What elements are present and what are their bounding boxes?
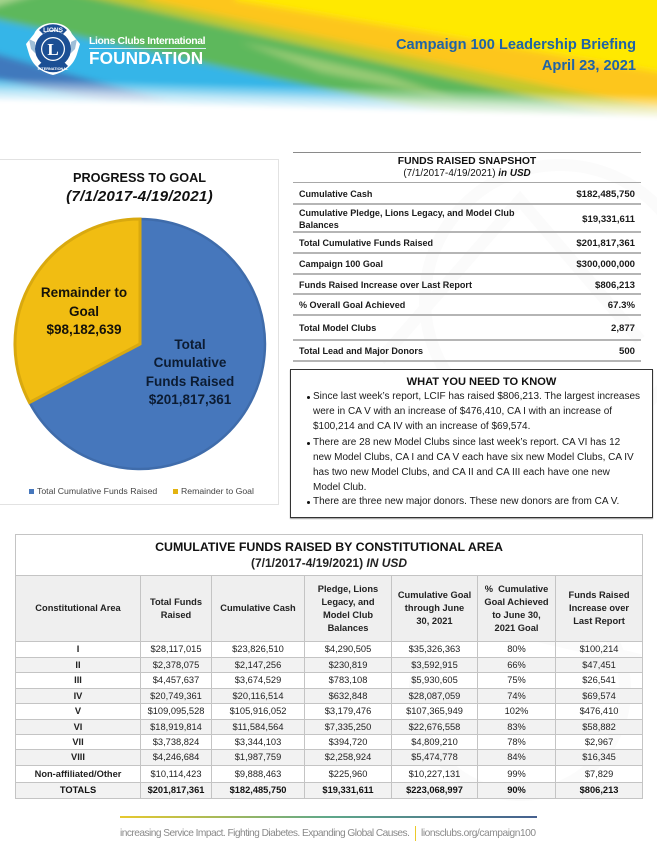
chart legend [29,486,254,496]
row: cumulative cash [293,182,641,205]
table: cumulative funds raised by constitutional area: $225,960 [329,768,367,778]
row: total cumulative: $201,817,361 [576,238,635,249]
pie label: total: Cumulative [154,355,226,370]
row: campaign goal: Campaign 100 Goal [299,259,383,269]
pie label: remainder [41,285,127,337]
row: campaign goal: $300,000,000 [576,259,635,270]
table: cumulative funds raised by constitutional area: $7,829 [585,768,613,778]
table: cumulative funds raised by constitutional area: $23,826,510 [232,644,284,654]
row: donors: 500 [619,346,635,357]
bullet 2: Model Club. [313,482,366,492]
bullet 3: There are three new major donors. These new donors are from CA V. [313,496,619,507]
bullet 2 [307,437,634,492]
table: cumulative funds raised by constitutional area: $58,882 [582,722,616,732]
table: cumulative funds raised by constitutional area: 2021 Goal [495,622,538,632]
table: cumulative funds raised by constitutional area: $2,258,924 [325,752,371,762]
footer tagline [120,816,537,841]
logo wordmark: Lions Clubs International [89,36,205,47]
table: cumulative funds raised by constitutional area: 30, 2021 [416,616,453,626]
table: cumulative funds raised by constitutional area: $10,227,131 [409,768,460,778]
table: cumulative funds raised by constitutional area: $4,809,210 [411,736,458,746]
icon: Lions logo: LIONS [43,27,64,34]
pie label: remainder: Remainder to [41,285,127,300]
table: cumulative funds raised by constitutional area: VIII [71,752,85,762]
bullet 2: new Model Clubs, CA I and CA V each have six new Model Clubs, CA IV [313,452,634,462]
table: cumulative funds raised by constitutional area: Last Report [573,616,625,626]
title [396,37,636,74]
panel: progress to goal [0,159,279,505]
table: cumulative funds raised by constitutional area: Cumulative Goal [398,590,471,600]
row: donors: Total Lead and Major Donors [299,346,423,356]
table: cumulative funds raised by constitutional area: Pledge, Lions [318,584,378,594]
row: total cumulative: Total Cumulative Funds Raised [299,238,433,248]
table: cumulative funds raised by constitutional area: 74% [507,690,526,700]
row: model clubs: Total Model Clubs [299,323,376,333]
bullet 1: $100,214 and CA IV with an increase of $69,574. [313,421,530,432]
pie chart [13,218,266,470]
bullet 1: Since last week’s report, LCIF has raised $806,213. The largest increases [313,391,640,402]
table: cumulative funds raised by constitutional area: $11,584,564 [232,722,284,732]
pie label: total [146,337,234,407]
chart legend: Remainder to Goal [181,486,254,496]
table: cumulative funds raised by constitutional area: $7,335,250 [325,722,371,732]
table: cumulative funds raised by constitutional area: Constitutional Area [35,603,121,613]
table: cumulative funds raised by constitutional area: $22,676,558 [409,722,460,732]
table: cumulative funds raised by constitutional area: $806,213 [580,785,618,795]
table: cumulative funds raised by constitutional area: 99% [507,768,526,778]
table: cumulative funds raised by constitutional area: $16,345 [582,752,616,762]
table: cumulative funds raised by constitutional area: $9,888,463 [235,768,281,778]
table: cumulative funds raised by constitutional area: $201,817,361 [148,785,204,795]
row: cumulative cash: Cumulative Cash [299,189,372,199]
row: model clubs [293,316,641,341]
table: cumulative funds raised by constitutional area: $2,378,075 [153,660,199,670]
table: cumulative funds raised by constitutional area: $3,179,476 [325,706,371,716]
table: cumulative funds raised by constitutional area: $20,749,361 [150,690,202,700]
table: cumulative funds raised by constitutional area: Cumulative Cash [220,603,296,613]
table: cumulative funds raised by constitutional area: $2,147,256 [235,660,281,670]
row: campaign goal [293,254,641,275]
panel: what you need to know [290,369,653,518]
row: percent achieved: % Overall Goal Achieved [299,300,405,310]
table: cumulative funds raised by constitutional area: $3,738,824 [153,736,199,746]
pie label: remainder: $98,182,639 [46,322,122,337]
table: cumulative funds raised by constitutional area: $783,108 [329,675,367,685]
table: cumulative funds raised by constitutional area: $47,451 [582,660,616,670]
row: pledge balances: Balances [299,220,339,230]
table: cumulative funds raised by constitutional area: $5,930,605 [411,675,458,685]
table: cumulative funds raised by constitutional area: Legacy, and [321,596,375,606]
table: cumulative funds raised by constitutional area: $28,087,059 [409,690,460,700]
table: cumulative funds raised by constitutional area: $26,541 [582,675,616,685]
table: cumulative funds raised by constitutional area: 78% [507,736,526,746]
table: cumulative funds raised by constitutional area: VII [72,736,84,746]
table: cumulative funds raised by constitutional area: $3,344,103 [235,736,281,746]
row: pledge balances [293,205,641,233]
table: cumulative funds raised by constitutional area: 83% [507,722,526,732]
table: cumulative funds raised by constitutional area: $10,114,423 [150,768,202,778]
icon: Lions logo: L [47,40,59,59]
table: cumulative funds raised by constitutional area: 80% [507,644,526,654]
table: cumulative funds raised by constitutional area: $3,674,529 [235,675,281,685]
footer tagline: increasing Service Impact. Fighting Diabetes. Expanding Global Causes. [120,828,409,839]
table: cumulative funds raised by constitutional area [15,534,643,799]
row: cumulative cash: $182,485,750 [576,189,635,200]
table: cumulative funds raised by constitutional area: $476,410 [580,706,618,716]
row: total cumulative [293,233,641,254]
table: cumulative funds raised by constitutional area: $394,720 [329,736,367,746]
bullet 1 [307,391,640,432]
row: model clubs: 2,877 [611,323,635,334]
table: cumulative funds raised by constitutional area: 84% [507,752,526,762]
table: cumulative funds raised by constitutional area: Raised [161,610,191,620]
table: cumulative funds raised by constitutional area: 90% [507,785,526,795]
table: cumulative funds raised by constitutional area: 66% [507,660,526,670]
logo wordmark: FOUNDATION [89,48,203,68]
callout heading: WHAT YOU NEED TO KNOW [407,376,556,388]
table: cumulative funds raised by constitutional area: $28,117,015 [150,644,202,654]
table: cumulative funds raised by constitutional area: $105,916,052 [230,706,286,716]
title: Campaign 100 Leadership Briefing [396,37,636,53]
row: pledge balances: $19,331,611 [582,214,635,225]
table: cumulative funds raised by constitutional area: Goal Achieved [484,596,549,606]
header banner [0,0,657,118]
bullet 2: has two new Model Clubs, and CA II and CA III each have one new [313,466,610,478]
table: cumulative funds raised by constitutional area: TOTALS [60,785,96,795]
logo wordmark [89,36,206,68]
table: cumulative funds raised by constitutional area: $4,290,505 [325,644,371,654]
footer tagline: lionsclubs.org/campaign100 [421,828,536,839]
table: cumulative funds raised by constitutional area: Balances [328,622,368,632]
table: cumulative funds raised by constitutional area: $35,326,363 [409,644,460,654]
table: cumulative funds raised by constitutional area: $632,848 [329,690,367,700]
table: cumulative funds raised by constitutional area: I [77,644,79,654]
snapshot heading [293,152,641,183]
table: cumulative funds raised by constitutional area: $4,246,684 [153,752,199,762]
title: April 23, 2021 [542,58,636,74]
table: cumulative funds raised by constitutional area: $107,365,949 [406,706,463,716]
table: cumulative funds raised by constitutional area: IV [74,690,82,700]
row: increase: $806,213 [595,280,635,291]
row: percent achieved: 67.3% [608,300,635,311]
table: cumulative funds raised by constitutional area: Increase over [569,603,629,613]
panel: funds raised snapshot [293,152,641,183]
slice: total cumulative funds raised [30,219,265,469]
chart date range: (7/1/2017-4/19/2021) [66,188,213,205]
pie label: remainder: Goal [69,304,99,318]
pie label: total: $201,817,361 [149,392,231,407]
chart heading: PROGRESS TO GOAL [73,171,206,185]
pie label: total: Funds Raised [146,374,234,389]
table: cumulative funds raised by constitutional area: to June 30, [492,610,541,620]
table: cumulative funds raised by constitutional area: $100,214 [580,644,618,654]
table: cumulative funds raised by constitutional area: III [74,675,82,685]
table: cumulative funds raised by constitutional area: CUMULATIVE FUNDS RAISED BY CONSTITUTIONAL AREA [155,540,503,554]
row: increase: Funds Raised Increase over Last Report [299,280,472,290]
bullet 2: There are 28 new Model Clubs since last week’s report. CA VI has 12 [313,437,620,448]
table: cumulative funds raised by constitutional area: VI [74,722,82,732]
table: cumulative funds raised by constitutional area: $109,095,528 [148,706,204,716]
table: cumulative funds raised by constitutional area: 75% [507,675,526,685]
table: cumulative funds raised by constitutional area: $20,116,514 [232,690,284,700]
table: cumulative funds raised by constitutional area: $4,457,637 [153,675,199,685]
table: cumulative funds raised by constitutional area: $230,819 [329,660,367,670]
icon: Lions logo: INTERNATIONAL [38,67,69,71]
row: pledge balances: Cumulative Pledge, Lions Legacy, and Model Club [299,208,514,218]
table: cumulative funds raised by constitutional area: $69,574 [582,690,616,700]
bullet 1: were in CA V with an increase of $476,410, CA I with an increase of [313,406,612,417]
table: cumulative funds raised by constitutional area: $18,919,814 [150,722,202,732]
table: cumulative funds raised by constitutional area: (7/1/2017-4/19/2021) IN USD [251,556,407,570]
icon: Lions logo [26,23,80,75]
row: percent achieved [293,295,641,316]
chart legend: Total Cumulative Funds Raised [37,486,157,496]
table: cumulative funds raised by constitutional area: V [75,706,81,716]
table: cumulative funds raised by constitutional area: $182,485,750 [230,785,286,795]
table: cumulative funds raised by constitutional area: through June [405,603,464,613]
row: donors [293,341,641,362]
table: cumulative funds raised by constitutional area: Model Club [323,610,373,620]
slice: remainder to goal [15,219,140,402]
table: cumulative funds raised by constitutional area: % Cumulative [485,584,548,594]
table: cumulative funds raised by constitutional area: 102% [505,706,528,716]
table: cumulative funds raised by constitutional area: $2,967 [585,736,613,746]
table: cumulative funds raised by constitutional area: II [75,660,81,670]
row: increase [293,275,641,295]
table: cumulative funds raised by constitutional area: Non-affiliated/Other [35,768,121,778]
table: cumulative funds raised by constitutional area: $19,331,611 [322,785,374,795]
snapshot heading: FUNDS RAISED SNAPSHOT [398,156,536,167]
pie label: total: Total [174,337,206,352]
table: cumulative funds raised by constitutional area: Funds Raised [569,590,630,600]
table: cumulative funds raised by constitutional area: Total Funds [150,596,202,606]
table: cumulative funds raised by constitutional area: $223,068,997 [406,785,463,795]
table: cumulative funds raised by constitutional area: $3,592,915 [411,660,458,670]
table: cumulative funds raised by constitutional area: $1,987,759 [235,752,281,762]
table: cumulative funds raised by constitutional area: $5,474,778 [411,752,458,762]
snapshot heading: (7/1/2017-4/19/2021) in USD [403,168,531,179]
